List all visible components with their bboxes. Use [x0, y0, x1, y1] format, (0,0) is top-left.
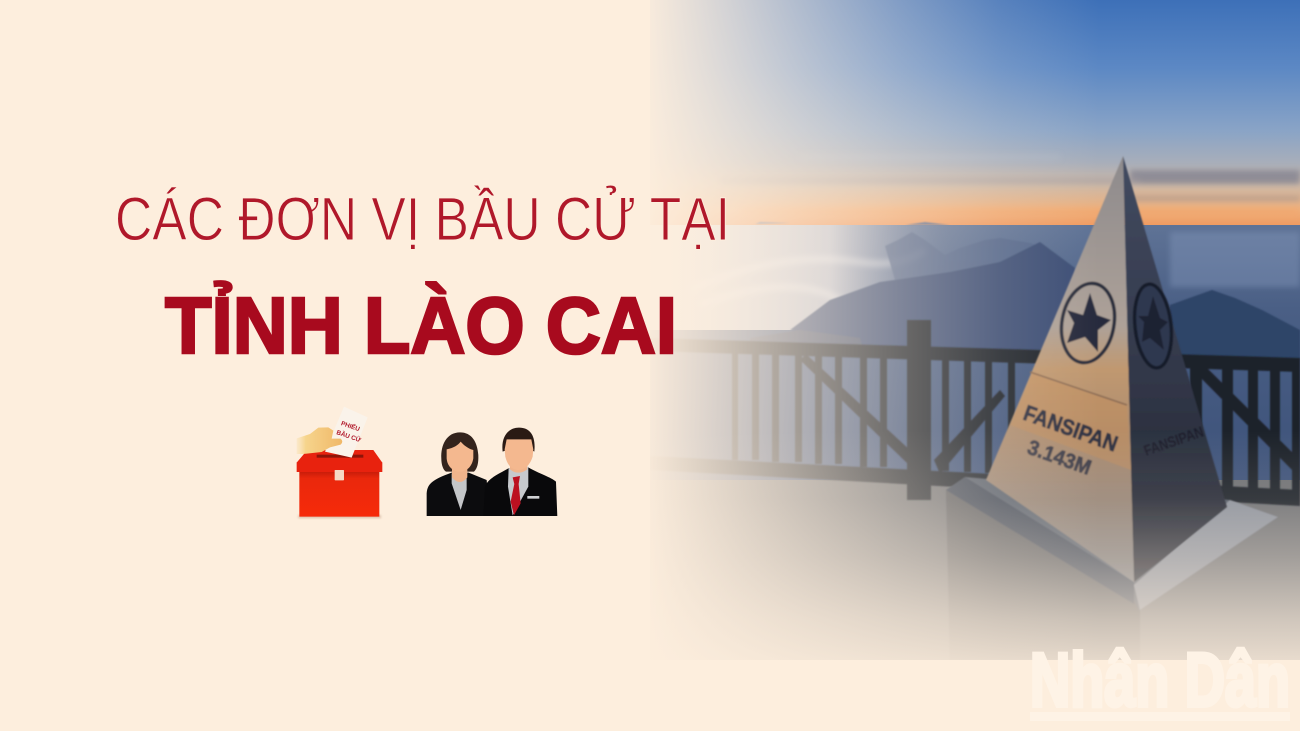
title line 1: CÁC ĐƠN VỊ BẦU CỬ TẠI — [115, 185, 730, 253]
latch — [335, 470, 344, 480]
photo fade overlays — [650, 0, 1300, 660]
man — [483, 428, 557, 516]
wooden railing — [650, 320, 1300, 506]
sea of clouds — [650, 225, 1300, 505]
deck and lower photo backdrop — [650, 480, 1300, 660]
ballot paper: BẦU CỬ — [335, 426, 363, 444]
distant mountains — [750, 222, 1300, 360]
hand — [297, 427, 342, 454]
box shadow — [298, 515, 381, 518]
photo: Fansipan summit at dawn — [650, 0, 1300, 660]
sky at dawn — [650, 0, 1300, 226]
pyramid side face — [1123, 156, 1227, 582]
box lid — [297, 450, 382, 472]
star emblem side — [1131, 282, 1175, 370]
ballot paper: PHIẾU — [340, 417, 362, 433]
engraved label side face: FANSIPAN — [1142, 424, 1206, 460]
box body — [299, 472, 379, 517]
icon: male and female candidates — [427, 428, 557, 516]
pyramid front face — [986, 156, 1134, 582]
pyramid base platform — [946, 476, 1278, 609]
title line 2: TỈNH LÀO CAI — [165, 281, 677, 370]
ballot paper — [325, 407, 368, 458]
woman — [427, 432, 490, 516]
Fansipan pyramid marker — [986, 156, 1227, 582]
engraved label FANSIPAN: FANSIPAN — [1020, 400, 1121, 456]
star emblem front — [1058, 280, 1118, 366]
engraved label altitude: 3.143M — [1024, 436, 1094, 480]
icon: ballot box with hand — [297, 407, 382, 518]
